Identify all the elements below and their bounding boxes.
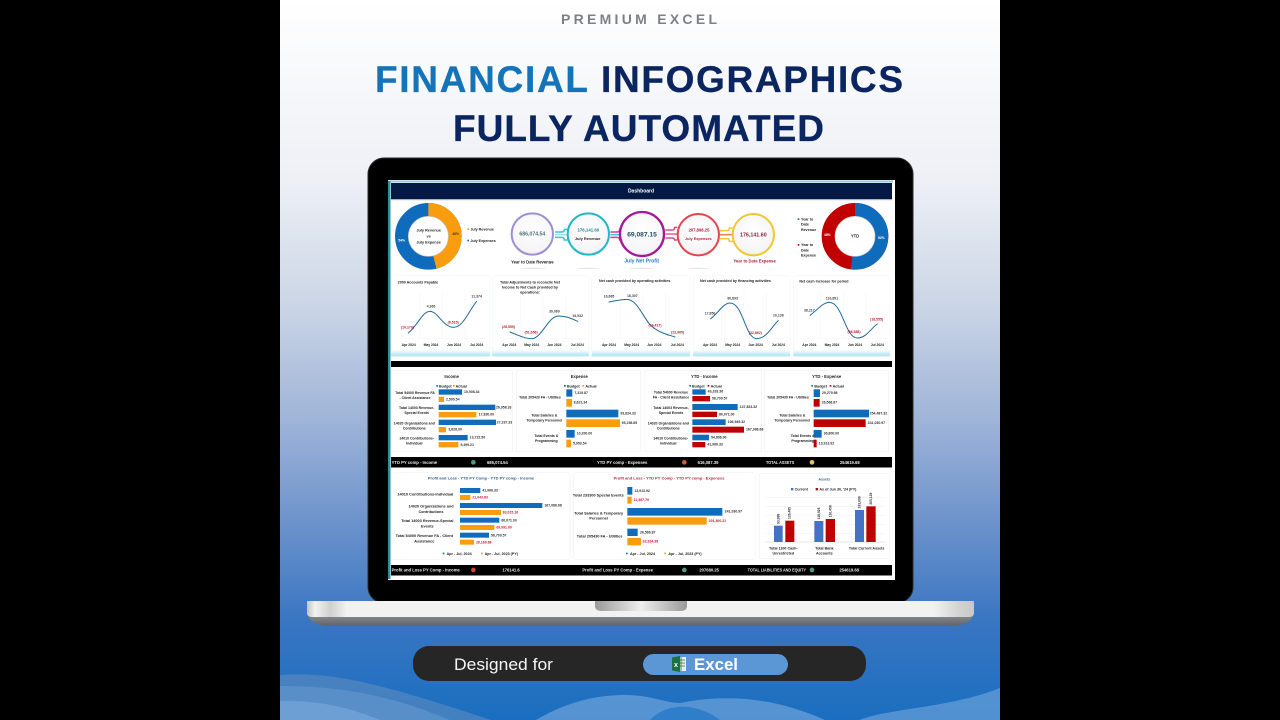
bar chart: P&L income comparison: Apr - Jul, 2023 (PY) [485,552,519,556]
bar chart: P&L income comparison: 83,015.16 [503,511,518,515]
KPI circle: July net profit: July Net Profit [624,259,659,265]
KPI circle: year to date revenue [511,213,554,269]
KPI circle: July expenses: 207,898.25 [689,228,710,233]
column chart: assets: 93,088 [776,514,780,524]
line chart: total adjustments: Jun 2024 [547,343,562,347]
bar chart: P&L expense comparison: 26,566.87 [640,530,656,534]
YTD legend: Revenue [801,228,816,232]
KPI bar: YTD: 686,074.54 [487,460,508,465]
designed for pill [413,646,866,681]
column chart: assets: Current [795,487,809,491]
column chart: assets: Accounts [816,552,833,556]
bar chart: P&L expense comparison: Personnel [589,517,608,521]
bar charts B [645,370,888,452]
line chart: operating activities: 16,685 [604,295,614,299]
bar chart: P&L income comparison: 69,991.00 [496,526,512,530]
KPI bar: YTD: YTD PY comp - Income [392,460,438,465]
bar chart: YTD income: 80,071.00 [719,412,735,416]
line chart: total adjustments: 19,532 [572,314,583,318]
bar chart: income: 3,628.00 [448,428,462,432]
column chart: assets: Total Bank [815,546,835,550]
line chart: total adjustments: (51,656) [525,331,538,335]
laptop [307,158,974,626]
bar chart: YTD income: 14020 Organizations and [648,421,689,425]
bar chart: expense: Actual [585,384,597,388]
bar chart: P&L expense comparison: Total 233300 Special Events [573,493,624,497]
line chart: operating activities: Jun 2024 [647,343,662,347]
column chart: assets: Assets [818,478,830,482]
bar chart: income: Actual [456,384,467,388]
bar chart: YTD expense: Programming [791,439,814,443]
donut: July revenue vs expense: 54% [398,238,405,242]
bar chart: expense: Budget [567,384,580,388]
line chart: net cash increase [793,276,890,356]
KPI circle: July revenue [568,213,609,269]
column chart: assets: As of Jun 30, '24 (PY) [819,487,857,491]
line chart: 2000 accounts payable [391,276,490,356]
line chart: 2000 accounts payable: Jul 2024 [470,343,483,347]
bar chart: P&L expense comparison: Total 205430 FA - Utilities [577,535,623,539]
bar chart: expense: 10,200.00 [577,432,592,436]
bar chart: YTD expense: YTD - Expense [812,374,842,379]
bar chart: income: Individual [406,442,422,446]
laptop bezel [368,158,913,603]
line charts B [693,276,890,356]
line chart: net cash increase: May 2024 [825,343,840,347]
bar chart: expense: Total 205420 FA - Utilities [519,395,561,399]
bar chart: YTD income [645,370,764,452]
KPI bar: profit and loss: Profit and Loss PY Comp - Income [392,568,460,573]
donut: July revenue vs expense: July Revenue [416,229,441,233]
line chart: financing activities: 17,850 [705,311,715,315]
bar chart: income: Total 54000 Revenue FA [395,391,435,395]
KPI circle: year to date revenue: 686,074.54 [519,232,545,238]
bar chart: expense: Programming [535,439,558,443]
top row left: zoom coords [398,210,623,269]
bar chart: P&L income comparison: Total 14003 Revenue-Special [401,519,453,523]
line chart: 2000 accounts payable: 2000 Accounts Payable [398,280,438,284]
bar chart: income: Special Events [404,411,429,415]
line chart: net cash increase: Jul 2024 [871,343,884,347]
dashboard header [391,183,892,200]
laptop base [307,601,974,626]
bar chart: expense: Temporary Personnel [527,419,562,423]
line chart: 2000 accounts payable: (10,170) [401,326,414,330]
line chart: net cash increase: Jun 2024 [848,343,862,347]
line chart: total adjustments [492,276,589,356]
line charts A [391,276,690,356]
bar chart: income: Income [444,374,460,379]
bar chart: YTD income: Contributions [657,426,680,430]
KPI circle: year to date revenue: Year to Date Revenue [511,259,554,264]
line chart: net cash increase: (18,555) [870,317,883,321]
bar chart: YTD expense: 26,566.87 [822,401,837,405]
YTD legend: Expense [801,254,816,258]
bar chart: YTD expense: 36,800.00 [824,432,839,436]
bar chart: P&L expense comparison: Apr - Jul, 2023 (PY) [668,552,702,556]
line chart: financing activities: Apr 2024 [703,343,717,347]
KPI bar: profit and loss: 176141.6 [502,568,520,573]
donut: July revenue vs expense: 46% [452,232,459,236]
bar chart: expense: 93,824.33 [620,411,636,415]
line chart: net cash increase: Net cash increase for period [799,280,849,284]
background panel [280,0,1000,720]
donut: July revenue vs expense [398,210,496,263]
dashboard frame [388,180,893,579]
column chart: assets: 130,458 [828,505,832,517]
column chart: assets [759,473,889,558]
line chart: financing activities: May 2024 [725,343,740,347]
column chart: assets: 205,129 [869,492,873,505]
bar chart: YTD income: 106,949.32 [728,420,745,424]
KPI circle: July expenses [678,214,719,269]
line chart: financing activities [693,276,790,356]
KPI circle: July revenue: 176,141.60 [577,227,600,232]
bar chart: P&L expense comparison: 32,934.38 [643,540,658,544]
line chart: total adjustments: operations: [520,291,540,295]
bar chart: P&L income comparison: 167,086.68 [544,504,562,508]
Excel badge: Excel [694,655,738,674]
bar chart: income: 2,500.54 [446,397,460,401]
KPI bar: YTD: 616,087.39 [698,460,719,465]
bar chart: income [391,370,512,452]
bar chart: income: 14020 Organizations and [394,421,435,425]
bar chart: YTD expense: Total Events & [791,434,815,438]
bar chart: YTD income: 147,833.32 [740,405,757,409]
bar chart: P&L income comparison: Apr - Jul, 2024 [447,552,473,556]
Excel badge [643,654,788,675]
bar chart: P&L expense comparison: 241,030.97 [725,510,742,514]
bar chart: P&L expense comparison: Apr - Jul, 2024 [630,552,656,556]
lower charts A [392,473,755,560]
bar chart: P&L expense comparison: 11,387.79 [634,498,649,502]
bar chart: YTD expense: 29,279.98 [822,391,838,395]
bar chart: income: Total 14003 Revenue- [399,406,435,410]
bar chart: YTD income: 167,086.68 [746,427,764,431]
icon: Excel [672,656,686,672]
bar chart: YTD income: Special Events [659,411,683,415]
bar chart: income: 9,499.21 [460,443,474,447]
column chart: assets: Total Current Assets [849,546,884,550]
KPI circle: July revenue: July Revenue [575,236,601,241]
bar chart: P&L income comparison [392,473,570,560]
bar chart: income: 27,237.33 [497,421,512,425]
donut: July revenue vs expense: vs [427,234,431,238]
donut: July revenue vs expense: July Expenses [470,239,496,243]
KPI circle: July net profit: 69,087.15 [627,232,657,239]
top row centre: net profit [620,210,885,269]
bar chart: expense: Total Salaries & [531,414,558,418]
line chart: operating activities: Net cash provided by operating activities [599,279,670,283]
main title: INFOGRAPHICS [601,59,903,100]
donut: YTD: 48% [824,233,831,237]
bar chart: expense: 95,198.65 [622,421,637,425]
bar chart: YTD income: Budget [692,384,705,388]
lower charts B [759,473,889,558]
bar chart: income: 17,830.00 [479,413,494,417]
line chart: operating activities: (22,965) [671,330,684,334]
bar chart: income: 14010 Contributions- [399,437,435,441]
KPI circle: year to date expense [733,214,776,264]
bar chart: YTD expense: 13,913.92 [819,441,834,445]
decorative waves [280,674,1000,720]
bar chart: YTD expense: 241,030.97 [868,421,885,425]
column chart: assets: Total 1100 Cash- [769,546,798,550]
main title: FINANCIAL [375,59,588,100]
bar chart: YTD income: Total 54000 Revenue [654,391,688,395]
bar chart: income: - Client Assistance [399,396,431,400]
bar chart: P&L income comparison: Assistance [414,540,434,544]
KPI bar: profit and loss: 254619.68 [839,568,860,573]
line chart: net cash increase: Apr 2024 [802,343,817,347]
bar chart: P&L expense comparison: Profit and Loss - YTD PY Comp - YTD PY comp - Expenses [614,476,725,481]
donut: YTD: 52% [878,236,885,240]
line chart: financing activities: (32,862) [749,331,762,335]
line chart: financing activities: Jul 2024 [772,343,785,347]
donut: YTD: YTD [851,234,859,239]
bar chart: expense: 5,953.54 [573,441,587,445]
line chart: net cash increase: 38,217 [804,308,815,312]
bar chart: expense: Total Events & [534,434,559,438]
bar chart: YTD expense: 254,487.32 [870,411,887,415]
line chart: operating activities: Apr 2024 [602,343,616,347]
YTD legend [798,217,816,258]
bar chart: income: 26,958.33 [496,406,512,410]
designed for pill: Designed for [454,655,553,674]
bar chart: P&L expense comparison: 201,300.21 [709,519,726,523]
bar chart: P&L expense comparison: Total Salaries & Temporary [574,511,624,515]
bar chart: P&L income comparison: Contributions [418,510,444,514]
line chart: operating activities: (34,417) [649,323,661,327]
line chart: financing activities: 10,138 [773,313,784,317]
column chart: assets: Unrestricted [773,552,794,556]
bar chart: YTD expense: Total 205430 FA - Utilities [767,396,809,400]
bar chart: expense [516,370,640,452]
bar chart: P&L expense comparison [573,473,755,560]
bar chart: YTD income: 43,333.36 [708,390,723,394]
line chart: total adjustments: Total Adjustments to reconcile Net [500,280,561,284]
dashboard header: Dashboard [628,188,654,194]
YTD legend: Date [801,223,809,227]
bar chart: P&L income comparison: 28,160.68 [476,540,492,544]
line chart: total adjustments: 39,089 [549,309,560,313]
donut: July revenue vs expense: July Revenue [470,228,494,232]
KPI bar: profit and loss: 207680.25 [699,568,720,573]
connector [720,228,733,241]
KPI circle: year to date expense: Year to Date Expense [734,259,776,264]
bar chart: YTD income: Individual [660,441,676,445]
line chart: net cash increase: 110,891 [826,296,838,300]
line chart: operating activities [592,276,690,356]
line chart: operating activities: Jul 2024 [671,343,684,347]
bar chart: P&L income comparison: 58,709.57 [491,533,507,537]
YTD legend: Year to [801,243,814,247]
bar chart: YTD income: 58,709.57 [712,397,728,401]
line chart: operating activities: 18,307 [627,294,638,298]
bar chart: YTD income: Total 14003 Revenue- [653,406,690,410]
KPI bar: profit and loss: TOTAL LIABILITIES AND EQUITY [748,568,806,573]
column chart: assets: 119,925 [817,507,821,519]
line chart: 2000 accounts payable: May 2024 [424,343,439,347]
bar chart: P&L income comparison: 14020 Organizations and [408,504,454,508]
bar chart: P&L income comparison: 14010 Contributions-Individual [397,492,453,496]
bar chart: expense: 7,319.87 [574,391,588,395]
bar chart: income: Budget [439,384,452,388]
KPI circle: July expenses: July Expenses [685,237,712,241]
line chart: operating activities: May 2024 [624,343,639,347]
bar chart: YTD expense: Total Salaries & [779,413,806,417]
bar chart: P&L income comparison: 80,071.00 [501,518,517,522]
KPI circle: July net profit [620,212,664,269]
YTD legend: Date [801,248,809,252]
bar chart: YTD income: Actual [711,384,722,388]
small heading: PREMIUM EXCEL [561,11,717,27]
bar chart: expense: Expense [571,374,589,379]
bar chart: income: 10,008.34 [464,390,480,394]
bar chart: income: 13,722.50 [470,436,485,440]
line chart: total adjustments: May 2024 [524,343,539,347]
KPI bar: YTD [391,457,892,468]
bar chart: YTD income: 41,966.33 [707,443,723,447]
bar chart: P&L income comparison: Events [421,525,434,529]
YTD legend: Year to [801,217,814,221]
donut: YTD [824,210,885,263]
bar chart: P&L expense comparison: 13,913.92 [634,489,650,493]
bar chart: P&L income comparison: 41,966.33 [482,489,498,493]
bar chart: YTD expense: Budget [814,384,828,388]
bar chart: YTD expense [764,370,888,452]
line chart: total adjustments: Income to Net Cash provided by [502,286,559,290]
donut: July revenue vs expense: July Expense [416,240,441,244]
column chart: assets: 126,485 [788,507,792,519]
bar chart: P&L income comparison: Total 54000 Revenue FA - Client [396,534,454,538]
KPI bar: profit and loss [391,565,892,576]
line chart: total adjustments: Jul 2024 [571,343,584,347]
connector [610,229,623,240]
line chart: 2000 accounts payable: Apr 2024 [402,343,416,347]
connector [665,227,677,240]
bar chart: YTD income: 14010 Contributions- [653,436,689,440]
bar chart: income: Contributions [403,426,426,430]
bar chart: YTD expense: Actual [833,384,844,388]
line chart: 2000 accounts payable: 4,365 [427,305,435,309]
bar charts A [391,370,640,452]
bar chart: expense: 8,621.34 [574,401,587,405]
line chart: 2000 accounts payable: 11,374 [471,294,482,298]
icon: Excel: x [674,662,678,669]
KPI bar: YTD: TOTAL ASSETS [766,460,795,465]
bar chart: P&L income comparison: 21,043.83 [472,496,488,500]
KPI bar: YTD: 254619.68 [840,460,860,465]
connector [555,229,568,240]
line chart: net cash increase: (56,588) [848,330,860,334]
main title: FULLY AUTOMATED [453,108,824,149]
column chart: assets: 181,090 [858,496,862,508]
bar chart: P&L income comparison: Profit and Loss - YTD PY Comp - YTD PY comp - Income [428,476,535,481]
line chart: 2000 accounts payable: (6,515) [448,320,459,324]
line chart: financing activities: Jun 2024 [749,343,763,347]
KPI bar: profit and loss: Profit and Loss PY Comp - Expense [582,568,654,573]
line chart: total adjustments: (28,559) [502,325,515,329]
black divider bar [391,361,892,367]
bar chart: YTD income: FA - Client Assistance [653,396,689,400]
line chart: financing activities: 80,893 [727,296,738,300]
laptop screen [388,180,895,580]
KPI circle: year to date expense: 176,141.60 [740,232,767,238]
bar chart: YTD income: YTD - Income [691,374,718,379]
main title [375,59,903,149]
bar chart: YTD expense: Temporary Personnel [775,418,810,422]
bar chart: YTD income: 54,896.00 [711,435,727,439]
KPI bar: YTD: YTD PY comp - Expenses [597,460,648,465]
line chart: total adjustments: Apr 2024 [502,343,517,347]
line chart: financing activities: Net cash provided by financing activities [700,279,771,283]
line chart: 2000 accounts payable: Jun 2024 [447,343,461,347]
